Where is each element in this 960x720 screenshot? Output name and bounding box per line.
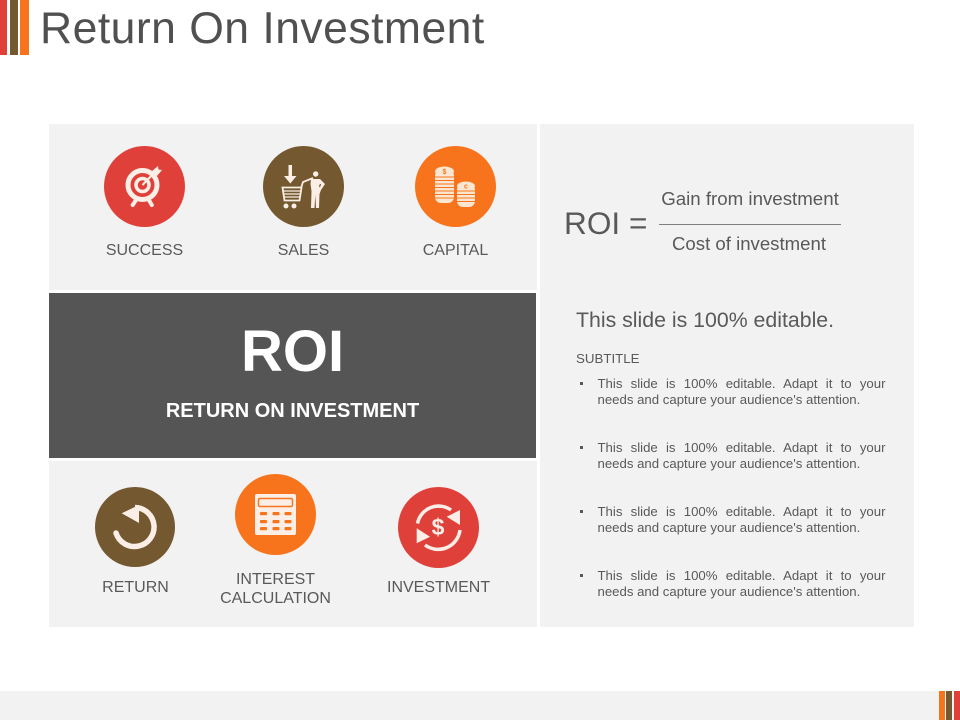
panel: top icons bbox=[49, 124, 537, 290]
subheading: return on investment: RETURN ON INVESTMENT bbox=[166, 400, 419, 422]
formula: denominator: Cost of investment bbox=[672, 233, 826, 254]
icon: investment exchange: $ bbox=[432, 514, 445, 540]
panel: bottom icons bbox=[49, 461, 537, 627]
icon: capital coins: c bbox=[464, 184, 468, 190]
label: capital: CAPITAL bbox=[423, 242, 488, 259]
panel: ROI banner bbox=[49, 293, 536, 458]
bullet 1 bbox=[580, 376, 886, 407]
bullet 2 bbox=[580, 440, 886, 471]
icon: calculator bbox=[235, 474, 316, 555]
footer band bbox=[0, 691, 960, 720]
panel: ROI formula and text bbox=[540, 124, 914, 627]
header accent bars bbox=[0, 0, 29, 55]
bullet 3: needs and capture your audience's attention. bbox=[598, 520, 860, 535]
bullet 1: This slide is 100% editable. Adapt it to your bbox=[598, 376, 886, 391]
icon: return arrow bbox=[95, 487, 175, 567]
icon: success target bbox=[104, 146, 185, 227]
icon: capital coins bbox=[415, 146, 496, 227]
bullet 2: needs and capture your audience's attention. bbox=[598, 456, 860, 471]
bullet 1: needs and capture your audience's attention. bbox=[598, 392, 860, 407]
bullet 2: This slide is 100% editable. Adapt it to your bbox=[598, 440, 886, 455]
formula: fraction line bbox=[659, 224, 841, 225]
bullet 4: needs and capture your audience's attention. bbox=[598, 584, 860, 599]
icon: sales cart and man bbox=[263, 146, 344, 227]
formula: ROI equals: ROI = bbox=[564, 205, 647, 241]
label: success: SUCCESS bbox=[106, 242, 183, 259]
bullet 4 bbox=[580, 568, 886, 599]
label: interest calculation bbox=[220, 571, 331, 607]
label: sales: SALES bbox=[278, 242, 329, 259]
label: investment: INVESTMENT bbox=[387, 579, 490, 596]
title: Return On Investment bbox=[40, 4, 485, 53]
icon: capital coins: $ bbox=[443, 169, 447, 176]
heading: ROI: ROI bbox=[241, 319, 344, 384]
icon: investment exchange bbox=[398, 487, 479, 568]
footer accent bars bbox=[939, 691, 960, 720]
bullet 4: This slide is 100% editable. Adapt it to your bbox=[598, 568, 886, 583]
formula: numerator: Gain from investment bbox=[661, 188, 839, 209]
text: editable statement: This slide is 100% editable. bbox=[576, 308, 834, 332]
label: interest calculation: INTEREST bbox=[236, 571, 315, 588]
bullet 3: This slide is 100% editable. Adapt it to your bbox=[598, 504, 886, 519]
bullet 3 bbox=[580, 504, 886, 535]
text: subtitle: SUBTITLE bbox=[576, 351, 640, 366]
label: return: RETURN bbox=[102, 579, 169, 596]
label: interest calculation: CALCULATION bbox=[220, 590, 331, 607]
